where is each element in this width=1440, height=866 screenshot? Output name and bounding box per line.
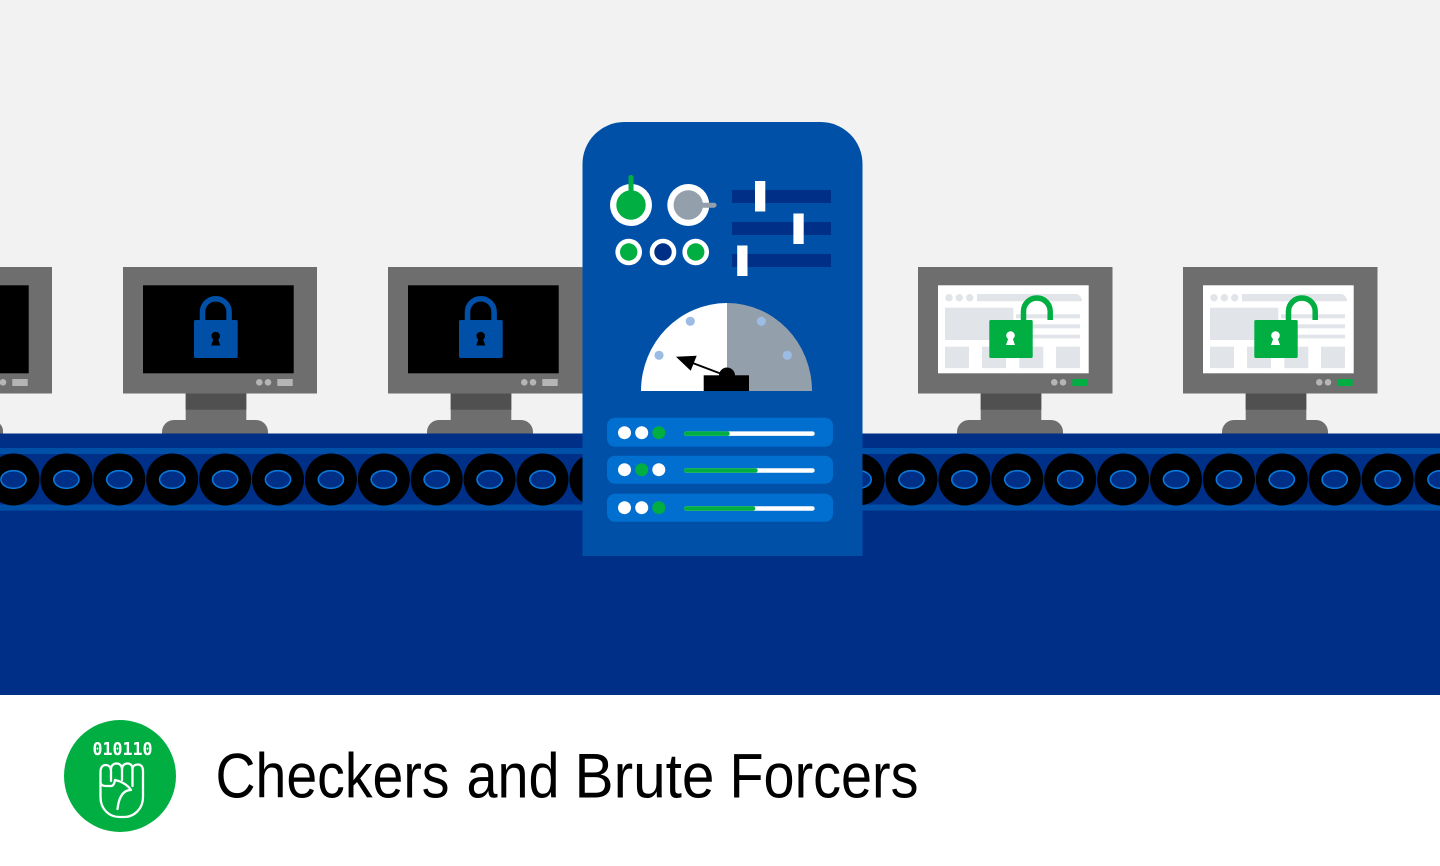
icon: closed padlock [194,299,238,358]
partial stand base at far left [0,424,3,434]
icon: closed padlock [459,299,503,358]
status row 3 [607,494,833,522]
unlocked monitor 1 [918,267,1112,434]
title: Forcers [730,742,918,812]
sliders [732,181,831,276]
status row 1 [607,418,833,447]
web page content [1210,294,1347,368]
title: and [466,742,560,812]
power knob [610,175,652,226]
gauge needle [676,356,749,391]
locked monitor 2 [388,267,582,434]
locked monitor, cropped at left edge [0,267,52,434]
web page content [945,294,1082,368]
unlocked monitor 2 [1183,267,1378,434]
panel: control machine [582,122,862,556]
icon: open padlock [989,298,1050,358]
title: Brute [574,742,714,812]
status row 2 [607,456,833,484]
binary digits: 010110 [92,739,152,760]
conveyor wheels [0,454,1440,506]
title: Checkers [216,742,450,812]
fist outline [100,764,143,817]
icon: open padlock [1254,298,1315,358]
gauge [641,303,812,391]
footer background [0,695,1440,866]
locked monitor 1 [123,267,317,434]
indicator lights [615,239,709,265]
icon: binary fist badge [64,720,176,832]
wheel hubs [1,471,1440,488]
title [216,742,918,812]
conveyor belt [0,434,1440,695]
grey dial knob [667,184,716,226]
